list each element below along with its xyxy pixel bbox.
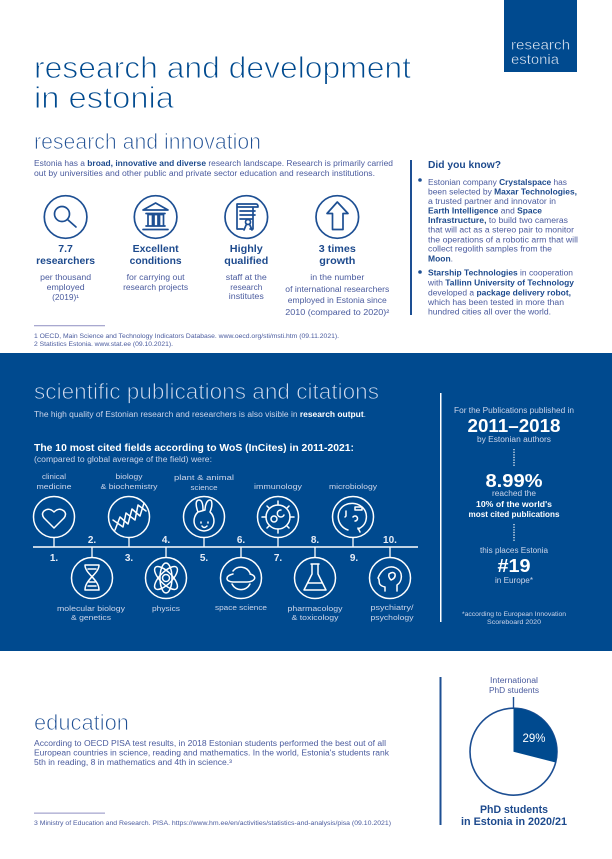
panel: PhD students pie chart: PhD students (480, 804, 548, 816)
logo: research estonia: research (511, 36, 570, 52)
field 10: psychiatry and psychology: 10. (383, 535, 397, 546)
field 8: pharmacology and toxicology: 8. (311, 535, 319, 546)
footnotes 1 and 2 (34, 325, 339, 348)
field 10: psychiatry and psychology: psychiatry/ (370, 603, 415, 612)
field 1: clinical medicine: clinical (42, 472, 66, 481)
pie chart 29% (470, 708, 557, 795)
intro text: Estonia has a broad, innovative and diverse research landscape. Research is primarily carried (34, 159, 393, 168)
intro text: out by universities and other public and private sector education and research institutions. (34, 169, 375, 178)
stat: qualified: institutes (229, 292, 264, 301)
field 3: biology and biochemistry: biology (116, 472, 143, 481)
field 2: molecular biology and genetics: & genetics (71, 613, 111, 622)
panel: publications summary: 2011–2018 (468, 416, 560, 436)
panel: publications summary: most cited publications (468, 510, 560, 519)
stat: qualified: qualified (224, 255, 268, 267)
stat: qualified: research (230, 283, 262, 292)
field 3: biology and biochemistry: & biochemistry (100, 482, 158, 491)
panel: publications summary: in Europe* (495, 576, 533, 585)
stat: researchers: employed (47, 283, 85, 292)
panel: did you know: collect regolith samples from the (428, 245, 553, 254)
field 8: pharmacology and toxicology (288, 535, 343, 622)
panel: PhD students pie chart (440, 676, 567, 828)
stat: conditions (123, 196, 188, 292)
field 2: molecular biology and genetics: 2. (88, 535, 96, 546)
field 2: molecular biology and genetics: molecular biology (57, 604, 125, 613)
panel: publications summary: this places Estonia (480, 546, 549, 555)
panel: did you know: the operations of a robotic arm that will (428, 236, 578, 245)
stat: qualified: Highly (230, 243, 263, 255)
field 9: microbiology: 9. (350, 553, 358, 564)
field 3: biology and biochemistry (100, 472, 158, 564)
chart heading: (compared to global average of the field) were: (34, 455, 212, 464)
panel: publications summary: reached the (492, 489, 537, 498)
stat: qualified (224, 196, 268, 301)
field 5: plant and animal science: science (190, 483, 218, 492)
field 10: psychiatry and psychology (370, 535, 415, 622)
field 5: plant and animal science (174, 473, 234, 564)
panel: publications summary: Scoreboard 2020 (487, 619, 542, 626)
panel: did you know: that will act as a stereo pair to monitor (428, 226, 574, 235)
education text: 5th in reading, 8 in mathematics and 4th in science.³ (34, 758, 232, 767)
panel: publications summary: #19 (498, 556, 530, 576)
footnotes 1 and 2: 2 Statistics Estonia. www.stat.ee (09.10.2021). (34, 341, 173, 348)
heading: education: education (34, 710, 129, 735)
stat: qualified: staff at the (226, 273, 267, 282)
panel: publications summary: 10% of the world's (476, 500, 553, 509)
footnotes 1 and 2: 1 OECD, Main Science and Technology Indicators Database. www.oecd.org/sti/msti.htm (09.11.2021). (34, 333, 339, 340)
education text (34, 739, 390, 767)
logo: research estonia (504, 0, 577, 72)
field 3: biology and biochemistry: 3. (125, 553, 133, 564)
stat: researchers (36, 196, 95, 302)
field 6: space science: space science (215, 603, 267, 612)
pie chart 29%: 29% (522, 733, 546, 745)
panel: publications summary: For the Publications published in (454, 406, 574, 415)
panel: did you know: with Tallinn University of Technology (427, 279, 575, 288)
field 8: pharmacology and toxicology: pharmacology (288, 604, 343, 613)
stat: researchers: researchers (36, 255, 95, 267)
title: research and development (34, 50, 411, 85)
stat: researchers: 7.7 (58, 243, 73, 255)
icon: diploma scroll (225, 196, 268, 238)
field 1: clinical medicine: 1. (50, 553, 58, 564)
panel: did you know: Did you know? (428, 159, 501, 171)
panel: did you know: developed a package delivery robot, (428, 289, 571, 298)
field 8: pharmacology and toxicology: & toxicology (292, 613, 339, 622)
field 7: immunology: immunology (254, 482, 302, 491)
education text: European countries in science, reading and mathematics. In the world, Estonia's students rank (34, 748, 390, 758)
stat: conditions: conditions (130, 255, 182, 267)
panel: publications summary: *according to European Innovation (462, 611, 567, 618)
panel: did you know: Infrastructure, to build two cameras (428, 216, 568, 225)
icon: up arrow (316, 196, 359, 238)
footnote 3: 3 Ministry of Education and Research. PISA. https://www.hm.ee/en/activities/statistics-and-analysis/pisa (09.10.2021) (34, 820, 391, 827)
stat: conditions: research projects (123, 283, 188, 292)
title: in estonia (34, 80, 175, 115)
panel: did you know: Starship Technologies in cooperation (428, 269, 573, 278)
field 9: microbiology: microbiology (329, 482, 377, 491)
stat: conditions: Excellent (133, 243, 179, 255)
publications intro: The high quality of Estonian research and researchers is also visible in research output . (34, 410, 366, 419)
logo: research estonia: estonia (511, 51, 559, 67)
panel: publications summary (440, 393, 574, 626)
stat: growth: 2010 (compared to 2020)² (285, 308, 390, 317)
field 2: molecular biology and genetics (57, 535, 125, 622)
field 7: immunology (254, 482, 302, 564)
panel: did you know: Earth Intelligence and Space (428, 207, 543, 216)
panel: did you know: which has been tested in more than (427, 298, 564, 307)
panel: did you know: a trusted partner and innovator in (428, 197, 556, 206)
field 10: psychiatry and psychology: psychology (370, 613, 414, 622)
field 5: plant and animal science: 5. (200, 553, 208, 564)
panel: PhD students pie chart: in Estonia in 2020/21 (461, 816, 567, 828)
title (34, 50, 411, 115)
stat: researchers: per thousand (40, 273, 91, 282)
icon: institution building (134, 196, 177, 238)
intro text (34, 159, 393, 178)
panel: scientific publications background (0, 353, 612, 651)
icon: magnifier (44, 196, 87, 238)
field 5: plant and animal science: plant & animal (174, 473, 234, 482)
panel: publications summary: 8.99% (486, 471, 542, 491)
field 1: clinical medicine: medicine (36, 482, 72, 491)
stat: growth: of international researchers (285, 285, 389, 294)
panel: PhD students pie chart: PhD students (489, 686, 539, 695)
stat: growth: growth (319, 255, 355, 267)
heading: research and innovation: research and innovation (34, 129, 261, 154)
chart heading (34, 442, 354, 464)
stat: growth: 3 times (319, 243, 356, 255)
field 4: physics: 4. (162, 535, 170, 546)
panel: did you know: been selected by Maxar Technologies, (428, 188, 577, 197)
stat: conditions: for carrying out (127, 273, 185, 282)
timeline of cited fields (33, 472, 418, 622)
education text: According to OECD PISA test results, in 2018 Estonian students performed the best out of all (34, 739, 386, 748)
panel: did you know: Moon. (428, 255, 453, 264)
panel: did you know: Estonian company Crystalspace has (428, 178, 567, 187)
stat: growth: in the number (310, 273, 365, 282)
field 1: clinical medicine (34, 472, 74, 564)
panel: did you know: hundred cities all over the world. (428, 308, 551, 317)
field 4: physics: physics (152, 604, 180, 613)
field 6: space science: 6. (237, 535, 245, 546)
field 4: physics (146, 535, 186, 613)
stat: growth (285, 196, 390, 317)
chart heading: The 10 most cited fields according to WoS (InCites) in 2011-2021: (34, 442, 354, 454)
field 7: immunology: 7. (274, 553, 282, 564)
panel: PhD students pie chart: International (490, 676, 538, 685)
heading: scientific publications and citations: scientific publications and citations (34, 379, 379, 404)
stat: growth: employed in Estonia since (288, 296, 387, 305)
panel: did you know (410, 159, 578, 317)
stat: researchers: (2019)¹ (52, 293, 79, 302)
panel: publications summary: by Estonian authors (477, 435, 551, 444)
field 9: microbiology (329, 482, 377, 564)
field 6: space science (215, 535, 267, 612)
